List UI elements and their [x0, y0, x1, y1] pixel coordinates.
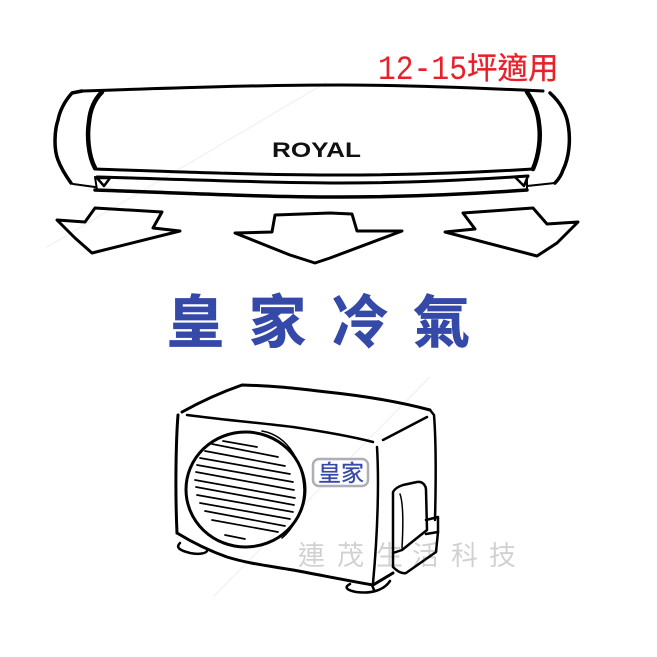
watermark: 連茂生活科技: 活 [412, 541, 439, 571]
title: 皇家冷氣: 氣 [413, 291, 470, 355]
arrow: airflow centre [235, 213, 402, 263]
arrow: airflow right [445, 208, 578, 256]
watermark: 連茂生活科技: 生 [376, 541, 403, 571]
title: 皇家冷氣: 皇 [167, 291, 224, 355]
icon: left foot [178, 543, 207, 554]
illustration: indoor air conditioner unit [55, 85, 569, 197]
icon: right foot [347, 581, 390, 593]
text: capacity 12-15 ping: 坪適用 [467, 52, 558, 86]
title: 皇家冷氣: 冷 [331, 291, 388, 355]
watermark: 連茂生活科技: 科 [451, 541, 478, 571]
text: capacity 12-15 ping [378, 52, 558, 90]
text: capacity 12-15 ping: 12-15 [378, 52, 467, 90]
watermark: 連茂生活科技: 茂 [337, 541, 364, 571]
watermark: 連茂生活科技: 技 [489, 541, 516, 571]
arrow: airflow left [57, 208, 180, 253]
watermark: 連茂生活科技: 連 [298, 541, 325, 571]
text: ROYAL logo: ROYAL [272, 139, 361, 162]
illustration: outdoor air conditioner unit [176, 385, 438, 593]
icon: side handle and valve cover [393, 482, 438, 573]
title: 皇家冷氣: 家 [249, 291, 306, 355]
badge: 皇家: 皇家 [318, 460, 364, 486]
icon: fan grille [186, 431, 305, 547]
